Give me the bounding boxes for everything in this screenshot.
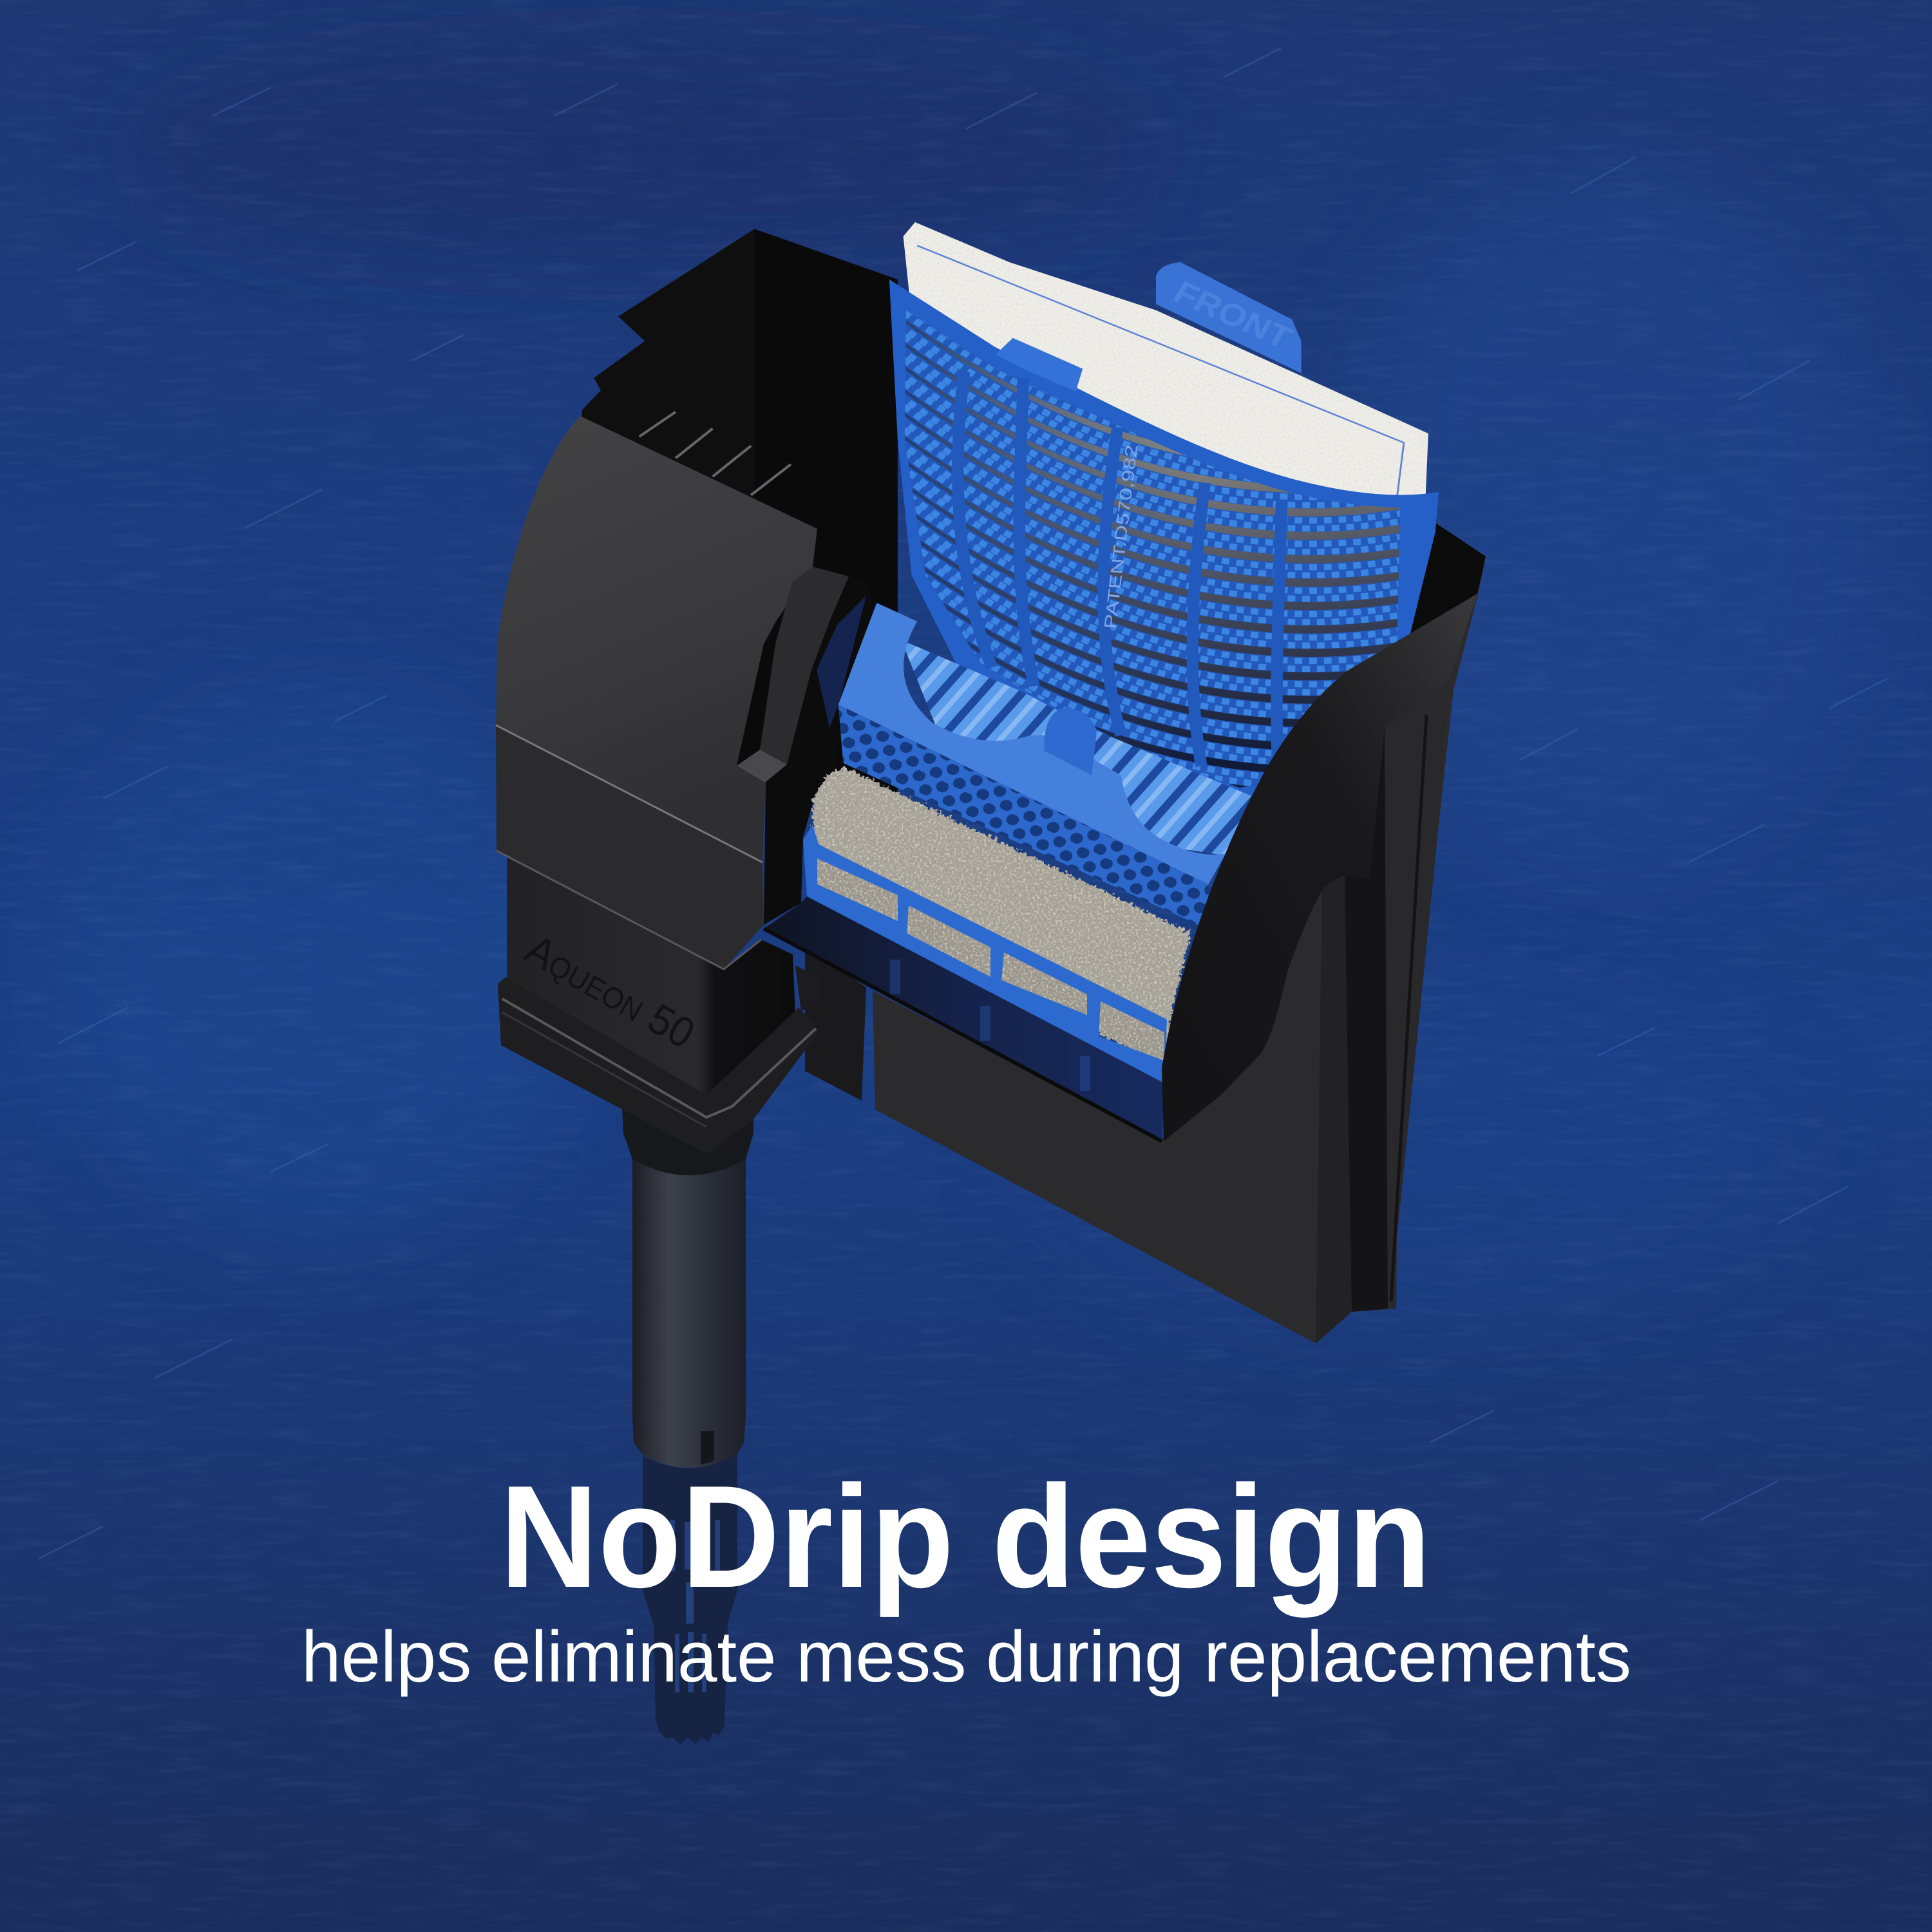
- blue tray: [838, 603, 1254, 929]
- chamfer: [1316, 876, 1352, 1343]
- blue frame: [803, 824, 1167, 1083]
- grid ribs: [958, 372, 1282, 779]
- grid frame: [889, 279, 1439, 800]
- right rail: [1385, 680, 1449, 1309]
- tray top surface: [838, 603, 1226, 884]
- strainer: [643, 1454, 737, 1744]
- sponge behind windows: [811, 850, 1172, 1069]
- white pad: [904, 222, 1428, 513]
- tray front honeycomb: [838, 705, 1208, 929]
- lower block: [507, 857, 795, 1108]
- main panel face: [873, 523, 1486, 1343]
- adjustment dial: [795, 965, 822, 1012]
- upper cover: [496, 416, 817, 862]
- pump duct: [764, 569, 876, 925]
- intake tube and strainer: [621, 1095, 753, 1744]
- lower cover band: [496, 725, 764, 969]
- drip ledge: [764, 896, 1164, 1141]
- grid mesh: [904, 310, 1400, 788]
- collar: [621, 1095, 753, 1175]
- tube clip slot: [701, 1431, 714, 1464]
- blue grid: [884, 279, 1439, 833]
- filter cartridge: [884, 222, 1439, 833]
- sponge: [813, 768, 1191, 1027]
- pump housing: [496, 416, 849, 1154]
- subtitle: helps eliminate mess during replacements: [301, 1616, 1631, 1697]
- rear panel: [805, 523, 1486, 1343]
- front wall: [1162, 594, 1477, 1141]
- rear interior: [1346, 523, 1486, 670]
- title: NoDrip design: [500, 1455, 1431, 1618]
- side column: [760, 567, 849, 764]
- patent text: PATENT:D570,982: [1101, 444, 1141, 630]
- mounting flange: [498, 977, 819, 1154]
- cover slot: [737, 567, 813, 766]
- back housing: [582, 229, 898, 810]
- screw pad: [737, 750, 787, 782]
- top clip: [996, 338, 1083, 392]
- dark channel: [1345, 728, 1388, 1312]
- front tab: [1156, 262, 1302, 373]
- small rear tab: [805, 947, 866, 1101]
- brand text: Aqueon 50: [518, 925, 703, 1057]
- tray tab: [1045, 708, 1097, 775]
- sponge tray: [803, 768, 1191, 1083]
- tube: [632, 1156, 746, 1468]
- tab text: FRONT: [1168, 274, 1298, 355]
- tray bars: [901, 640, 1254, 855]
